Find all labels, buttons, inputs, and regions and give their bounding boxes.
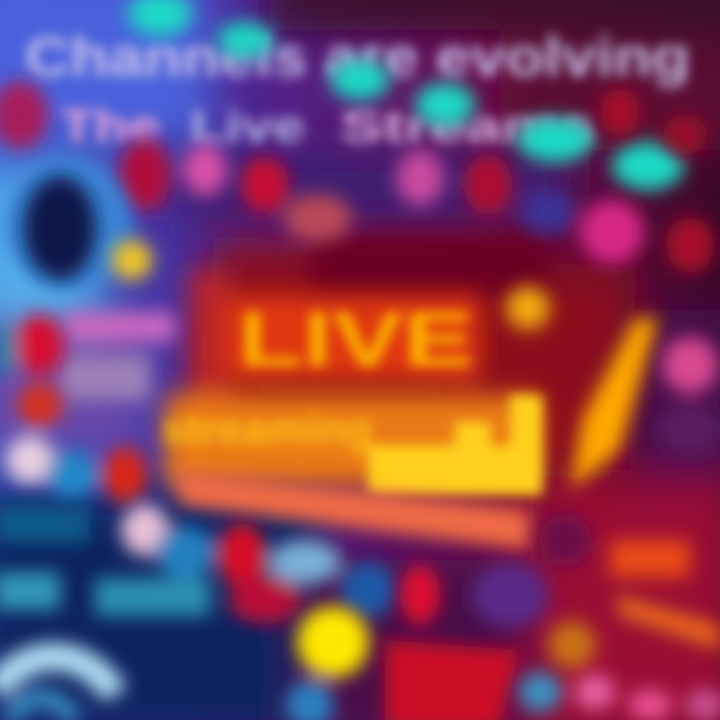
- red and pink icons row: [0, 81, 714, 273]
- icon: white swirl: [0, 657, 115, 720]
- subtitle: The: [60, 100, 160, 152]
- subtitle: [60, 100, 595, 152]
- icon: ring yellow dot: [112, 240, 152, 280]
- subheading: channels: streaming: [162, 405, 372, 454]
- card orange halo: [165, 270, 540, 485]
- teal accents: [128, 0, 684, 190]
- headline: LIVE: LIVE: [238, 295, 474, 383]
- left icon column: [0, 315, 147, 503]
- bottom left panel: [0, 504, 396, 624]
- bottom right icons: [518, 672, 720, 720]
- ring centre: [24, 176, 96, 280]
- card dark centre: [260, 235, 550, 398]
- right lower panel: [472, 514, 720, 669]
- icon: blue ring: [4, 161, 152, 289]
- icon: yellow circle: [286, 606, 369, 720]
- subtitle: Streams: [340, 100, 595, 152]
- subtitle: Live: [190, 100, 305, 152]
- icon: yellow dot: [506, 286, 550, 330]
- subheading: channels: [162, 395, 542, 495]
- left text block: [60, 312, 175, 400]
- icon: flame bar: [570, 318, 658, 490]
- right icons: [658, 337, 720, 456]
- text band: salmon caption: [175, 470, 530, 550]
- title: Channels are evolving: [25, 25, 690, 88]
- ring outer: [4, 161, 132, 289]
- icon: red block: [385, 565, 520, 720]
- panel: live card: [162, 235, 658, 550]
- card glow: [190, 235, 640, 480]
